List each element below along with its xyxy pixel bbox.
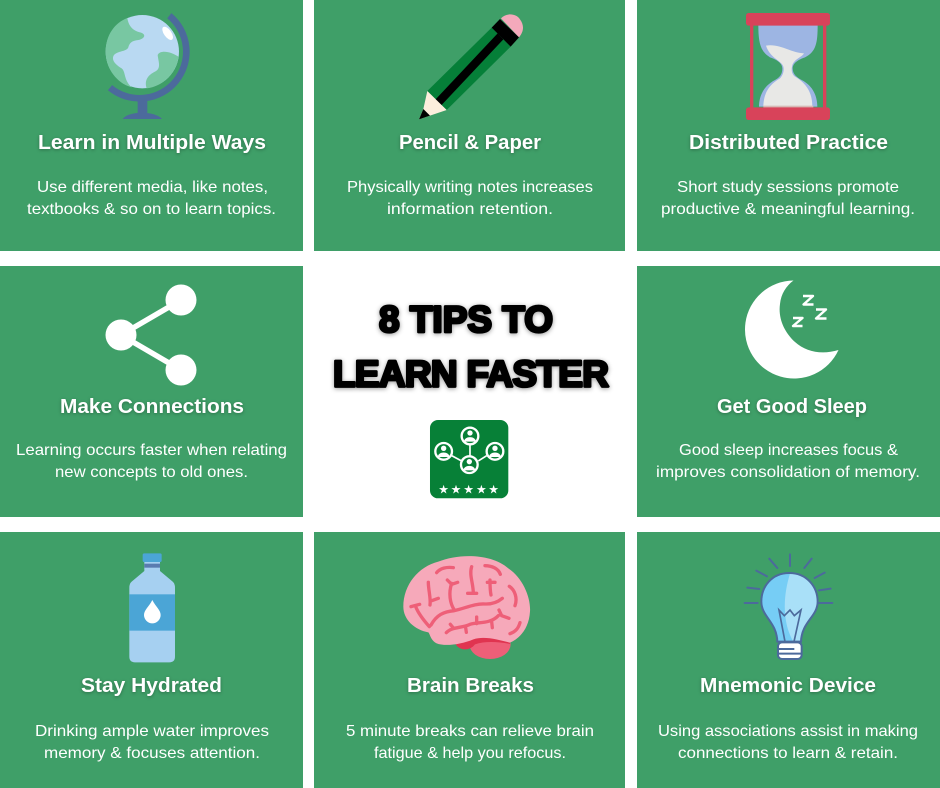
body text: 5 minute breaks can relieve brain bbox=[346, 723, 594, 740]
body text bbox=[27, 179, 276, 218]
heading: Get Good Sleep bbox=[717, 396, 867, 418]
body text: Using associations assist in making bbox=[658, 723, 918, 740]
body text: textbooks & so on to learn topics. bbox=[27, 201, 276, 218]
body text: Drinking ample water improves bbox=[35, 723, 269, 740]
panel: Learn in Multiple Ways bbox=[0, 0, 303, 251]
body text: Short study sessions promote bbox=[677, 179, 899, 196]
panel: Make Connections bbox=[0, 266, 303, 517]
heading: Mnemonic Device bbox=[700, 675, 876, 697]
body text: productive & meaningful learning. bbox=[661, 201, 915, 218]
title block bbox=[333, 299, 609, 394]
icon: network logo bbox=[430, 420, 508, 498]
heading: Learn in Multiple Ways bbox=[38, 132, 266, 154]
body text bbox=[347, 179, 593, 218]
heading: Distributed Practice bbox=[689, 132, 888, 154]
body text bbox=[656, 442, 920, 481]
body text: Learning occurs faster when relating bbox=[16, 442, 287, 459]
body text: Use different media, like notes, bbox=[37, 179, 268, 196]
icon: moon and zzz bbox=[745, 280, 838, 378]
body text bbox=[346, 723, 594, 762]
panel: Stay Hydrated bbox=[0, 532, 303, 788]
heading: Stay Hydrated bbox=[81, 675, 222, 697]
panel: Distributed Practice bbox=[637, 0, 940, 251]
icon: network logo: ★ bbox=[438, 483, 449, 497]
body text bbox=[658, 723, 918, 762]
icon: network logo: ★ bbox=[476, 483, 487, 497]
body text: information retention. bbox=[387, 201, 553, 218]
panel: Brain Breaks bbox=[314, 532, 625, 788]
heading: Pencil & Paper bbox=[399, 132, 541, 154]
heading: Make Connections bbox=[60, 396, 244, 418]
icon: network logo: ★ bbox=[451, 483, 461, 497]
body text: Good sleep increases focus & bbox=[679, 442, 898, 459]
body text: memory & focuses attention. bbox=[44, 745, 260, 762]
icon: globe bbox=[106, 15, 186, 119]
icon: pencil bbox=[419, 14, 523, 119]
icon: water bottle bbox=[129, 553, 175, 662]
icon: light bulb bbox=[745, 554, 832, 659]
panel: Get Good Sleep bbox=[637, 266, 940, 517]
body text: new concepts to old ones. bbox=[55, 464, 248, 481]
icon: hourglass bbox=[746, 13, 830, 120]
body text bbox=[661, 179, 915, 218]
icon: network logo: ★ bbox=[488, 483, 499, 497]
icon: network logo: ★ bbox=[463, 483, 474, 497]
body text bbox=[16, 442, 287, 481]
body text: Physically writing notes increases bbox=[347, 179, 593, 196]
body text: fatigue & help you refocus. bbox=[374, 745, 566, 762]
body text: improves consolidation of memory. bbox=[656, 464, 920, 481]
heading: Brain Breaks bbox=[407, 675, 534, 697]
panel: Mnemonic Device bbox=[637, 532, 940, 788]
icon: brain bbox=[403, 556, 530, 659]
title line 1: 8 TIPS TO bbox=[379, 299, 553, 340]
icon: share nodes bbox=[106, 284, 196, 386]
title line 2: LEARN FASTER bbox=[333, 354, 609, 394]
body text: connections to learn & retain. bbox=[678, 745, 898, 762]
panel: Pencil & Paper bbox=[314, 0, 625, 251]
body text bbox=[35, 723, 269, 762]
